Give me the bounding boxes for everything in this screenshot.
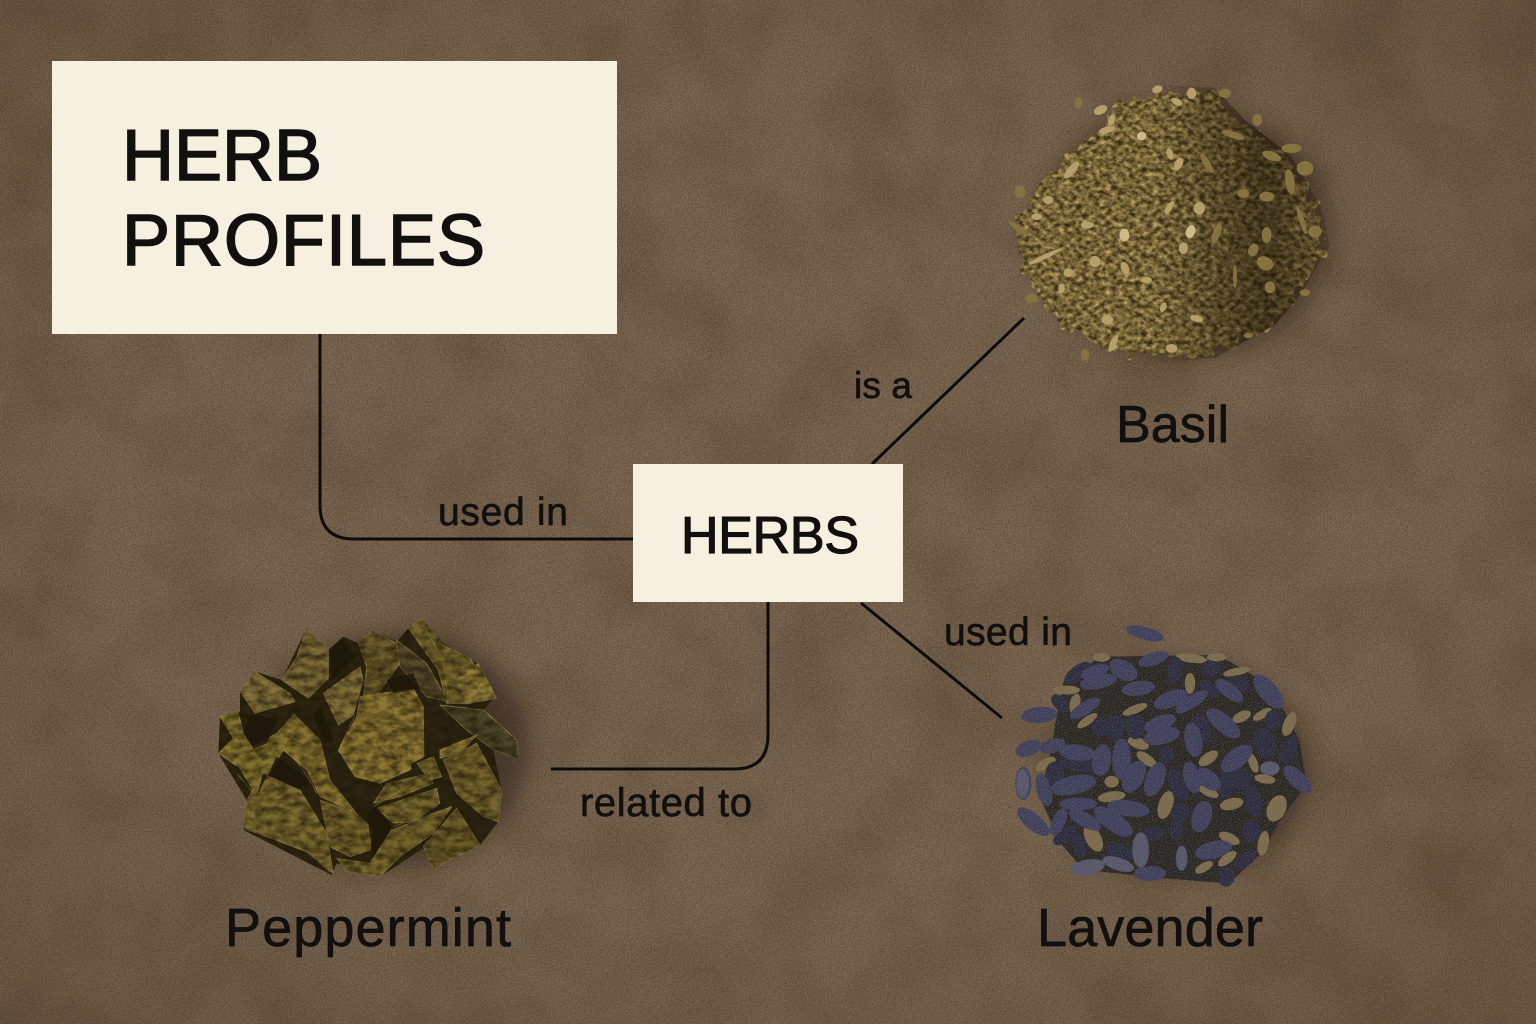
- herb image: peppermint leaves: [218, 618, 530, 877]
- edge label: used in (title): used in: [438, 491, 568, 534]
- herb image: lavender buds: [1015, 624, 1314, 887]
- herb label: Peppermint: Peppermint: [225, 898, 511, 958]
- title panel: [52, 61, 617, 334]
- title heading: PROFILES: [122, 201, 485, 281]
- central node: herbs: [633, 464, 903, 602]
- edge label: used in (lavender): used in: [944, 611, 1072, 654]
- edge label: related to: related to: [580, 781, 752, 825]
- herb label: Lavender: Lavender: [1037, 898, 1263, 958]
- herb label: Basil: Basil: [1116, 396, 1229, 454]
- title heading: HERB: [122, 116, 322, 196]
- connector: herbs to basil: [872, 318, 1024, 464]
- central node: herbs: HERBS: [681, 507, 859, 565]
- title heading: [122, 116, 485, 281]
- herb image: basil pile: [1007, 84, 1333, 365]
- connector: title to herbs: [320, 334, 634, 539]
- connector: herbs to peppermint: [551, 602, 768, 769]
- edge label: is a: is a: [854, 365, 912, 406]
- connector: herbs to lavender: [861, 603, 1002, 718]
